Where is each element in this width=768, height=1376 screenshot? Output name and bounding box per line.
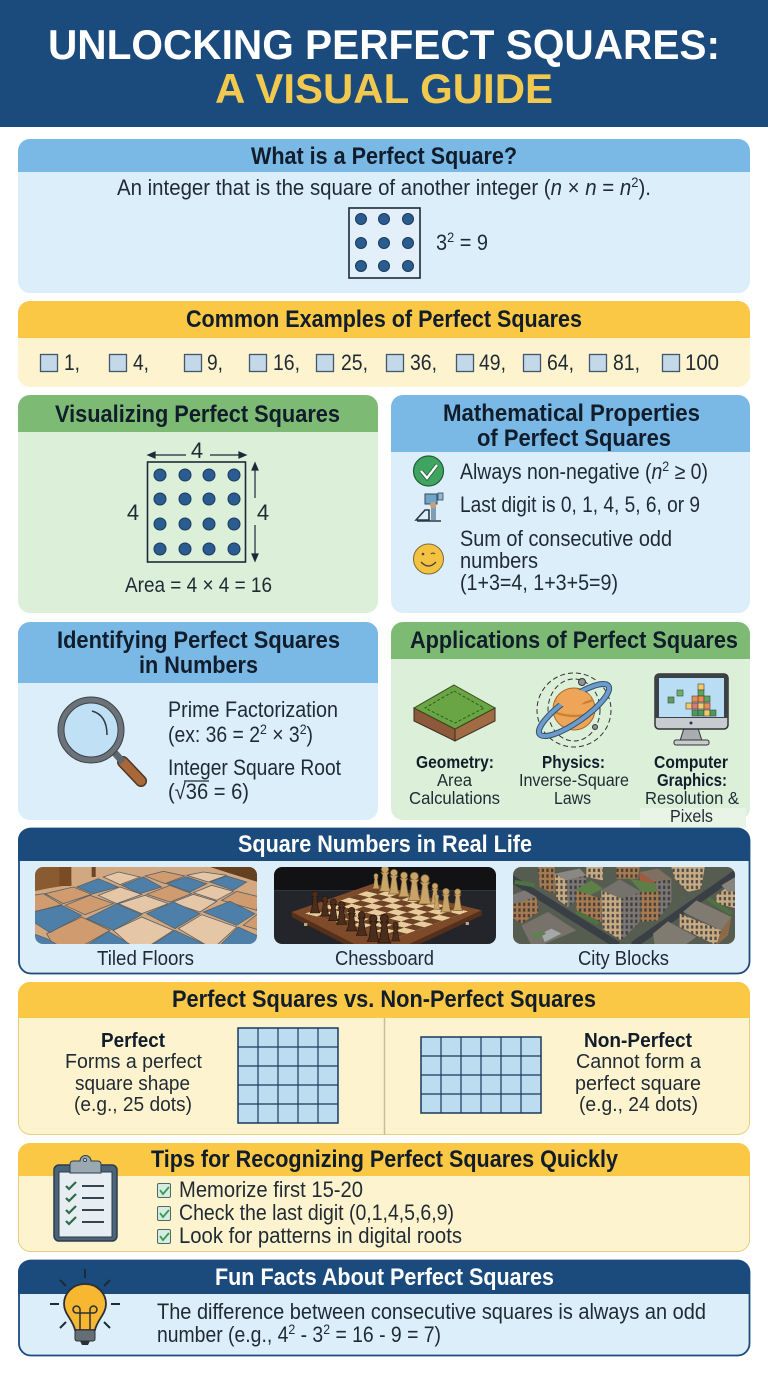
- panel: what is a perfect square: [18, 139, 750, 293]
- heading: real life: Square Numbers in Real Life: [238, 831, 532, 858]
- property: sum of odd numbers: numbers: [460, 548, 538, 573]
- application: computer graphics: Graphics:: [657, 770, 727, 790]
- icon: green check: [414, 456, 444, 486]
- icon: geometry tile: [414, 685, 495, 741]
- application: physics: Inverse-Square: [519, 770, 629, 790]
- icon: magnifying glass: [58, 697, 141, 781]
- fun fact text: The difference between consecutive squares is always an odd: [157, 1299, 706, 1324]
- caption: city blocks: City Blocks: [578, 948, 669, 970]
- panel: mathematical properties: [391, 395, 750, 613]
- property: non-negative: 2: [662, 458, 669, 474]
- fun fact text: 2: [288, 1321, 295, 1337]
- text: perfect: Forms a perfect: [65, 1051, 202, 1073]
- area formula: Area = 4 × 4 = 16: [125, 574, 272, 597]
- text: prime factorization: × 3: [267, 722, 300, 747]
- text: prime factorization: 2: [260, 721, 267, 737]
- fun fact text: 2: [323, 1321, 330, 1337]
- list of example numbers: 36,: [410, 350, 437, 375]
- text: integer square root: Integer Square Root: [168, 755, 341, 780]
- property: sum of odd numbers: (1+3=4, 1+3+5=9): [460, 570, 618, 595]
- property: non-negative: Always non-negative (n: [460, 459, 676, 484]
- icon: planet with rings: [533, 673, 615, 747]
- text: non-perfect: Cannot form a: [576, 1051, 702, 1073]
- text: non-perfect: Non-Perfect: [584, 1030, 692, 1052]
- text: integer square root: (√36 = 6): [168, 779, 249, 804]
- definition text: An integer that is the square of another integer (n × n = n: [117, 175, 632, 200]
- list of example numbers: 64,: [547, 350, 574, 375]
- list of example numbers: 49,: [479, 350, 506, 375]
- text: perfect: [65, 1030, 202, 1116]
- text: prime factorization: 2: [300, 721, 307, 737]
- list of example numbers: 81,: [613, 350, 640, 375]
- definition text: 2: [631, 174, 639, 190]
- heading: identifying: [57, 627, 340, 679]
- heading: tips: Tips for Recognizing Perfect Squares Quickly: [151, 1146, 619, 1173]
- heading: comparison: Perfect Squares vs. Non-Perfect Squares: [172, 986, 596, 1013]
- equation: 3 squared: = 9: [454, 230, 488, 255]
- icon: monitor with pixels: [655, 674, 728, 745]
- tips list: Memorize first 15-20: [179, 1177, 363, 1202]
- photo: chessboard: [273, 865, 500, 947]
- application: computer graphics: Computer: [654, 752, 728, 772]
- text: non-perfect: [575, 1030, 702, 1116]
- fun fact text: = 16 - 9 = 7): [330, 1322, 441, 1347]
- heading: mathematical properties: of Perfect Squares: [477, 425, 671, 452]
- caption: tiled floors: Tiled Floors: [97, 948, 194, 970]
- application: computer graphics: Pixels: [670, 806, 713, 826]
- heading: mathematical properties: Mathematical Properties: [443, 400, 700, 427]
- application: computer graphics: [645, 752, 739, 826]
- text: perfect: Perfect: [101, 1030, 165, 1052]
- panel: common examples: [18, 301, 750, 387]
- title banner: [0, 0, 768, 127]
- text: prime factorization: Prime Factorization: [168, 697, 338, 722]
- equation: 3 squared: 3: [436, 230, 448, 255]
- property: last digit: Last digit is 0, 1, 4, 5, 6, or 9: [460, 492, 700, 517]
- panel: tips: [18, 1143, 750, 1252]
- equation: 3 squared: 2: [447, 229, 454, 245]
- photo: city blocks: [511, 865, 738, 945]
- tips list: Look for patterns in digital roots: [179, 1223, 462, 1248]
- diagram: 4 by 4 dots: 4: [127, 500, 139, 525]
- photo: tiled floor: [33, 865, 260, 945]
- fun fact text: [157, 1299, 706, 1347]
- diagram: 3 by 3 dots: [349, 208, 420, 278]
- panel: square numbers in real life: [18, 828, 750, 974]
- property: non-negative: ≥ 0): [669, 459, 708, 484]
- application: geometry: Area: [437, 770, 472, 790]
- property: sum of odd numbers: Sum of consecutive odd: [460, 526, 672, 551]
- panel: identifying perfect squares: [18, 622, 378, 820]
- icon: smiley: [414, 544, 444, 574]
- heading: fun facts: Fun Facts About Perfect Squares: [215, 1264, 554, 1291]
- icon: light bulb: [50, 1269, 120, 1345]
- panel: applications: [391, 622, 750, 828]
- text: prime factorization: [168, 697, 338, 747]
- diagram: 4 by 4 dots: [127, 438, 269, 562]
- grid: 5 by 5: [238, 1028, 338, 1123]
- text: non-perfect: (e.g., 24 dots): [579, 1094, 698, 1116]
- heading: visualizing: Visualizing Perfect Squares: [55, 401, 340, 428]
- panel: fun facts: [18, 1260, 750, 1356]
- panel: visualizing perfect squares: [18, 395, 378, 613]
- heading: what is a perfect square: What is a Perfect Square?: [251, 143, 517, 170]
- application: computer graphics: Resolution &: [645, 788, 739, 808]
- application: geometry: [409, 752, 500, 808]
- property: sum of odd numbers: [460, 526, 672, 595]
- heading: mathematical properties: [443, 400, 700, 452]
- caption: chessboard: Chessboard: [335, 948, 434, 970]
- list of example numbers: 1,: [64, 350, 80, 375]
- application: geometry: Calculations: [409, 788, 500, 808]
- fun fact text: - 3: [295, 1322, 323, 1347]
- heading: applications: Applications of Perfect Squares: [410, 627, 738, 654]
- list of example numbers: 9,: [207, 350, 223, 375]
- application: physics: Physics:: [542, 752, 605, 772]
- text: non-perfect: perfect square: [575, 1073, 701, 1095]
- list of example numbers: 25,: [341, 350, 368, 375]
- tips list: Check the last digit (0,1,4,5,6,9): [179, 1200, 454, 1225]
- fun fact text: number (e.g., 4: [157, 1322, 306, 1347]
- list of example numbers: 4,: [133, 350, 149, 375]
- text: prime factorization: (ex: 36 = 2: [168, 722, 273, 747]
- definition text: ).: [639, 175, 651, 200]
- heading: identifying: Identifying Perfect Squares: [57, 627, 340, 654]
- list of example numbers: 100: [685, 350, 719, 375]
- title banner: A VISUAL GUIDE: [215, 65, 553, 112]
- heading: common examples: Common Examples of Perfect Squares: [186, 306, 582, 333]
- panel: perfect vs non-perfect: [18, 982, 750, 1135]
- icon: clipboard: [54, 1156, 117, 1241]
- text: integer square root: [168, 755, 341, 804]
- application: physics: Laws: [554, 788, 591, 808]
- list of example numbers: 16,: [273, 350, 300, 375]
- icon: small figure at desk: [416, 493, 443, 521]
- heading: identifying: in Numbers: [139, 652, 258, 679]
- text: prime factorization: ): [307, 722, 313, 747]
- tips list: [158, 1177, 462, 1248]
- text: perfect: square shape: [75, 1073, 190, 1095]
- text: perfect: (e.g., 25 dots): [74, 1094, 192, 1116]
- title banner: UNLOCKING PERFECT SQUARES:: [48, 21, 720, 68]
- list of example numbers: [40, 350, 719, 375]
- grid: 6 by 4: [421, 1037, 541, 1113]
- application: geometry: Geometry:: [416, 752, 494, 772]
- application: physics: [519, 752, 629, 808]
- diagram: 4 by 4 dots: 4: [191, 438, 203, 463]
- diagram: 4 by 4 dots: 4: [257, 500, 269, 525]
